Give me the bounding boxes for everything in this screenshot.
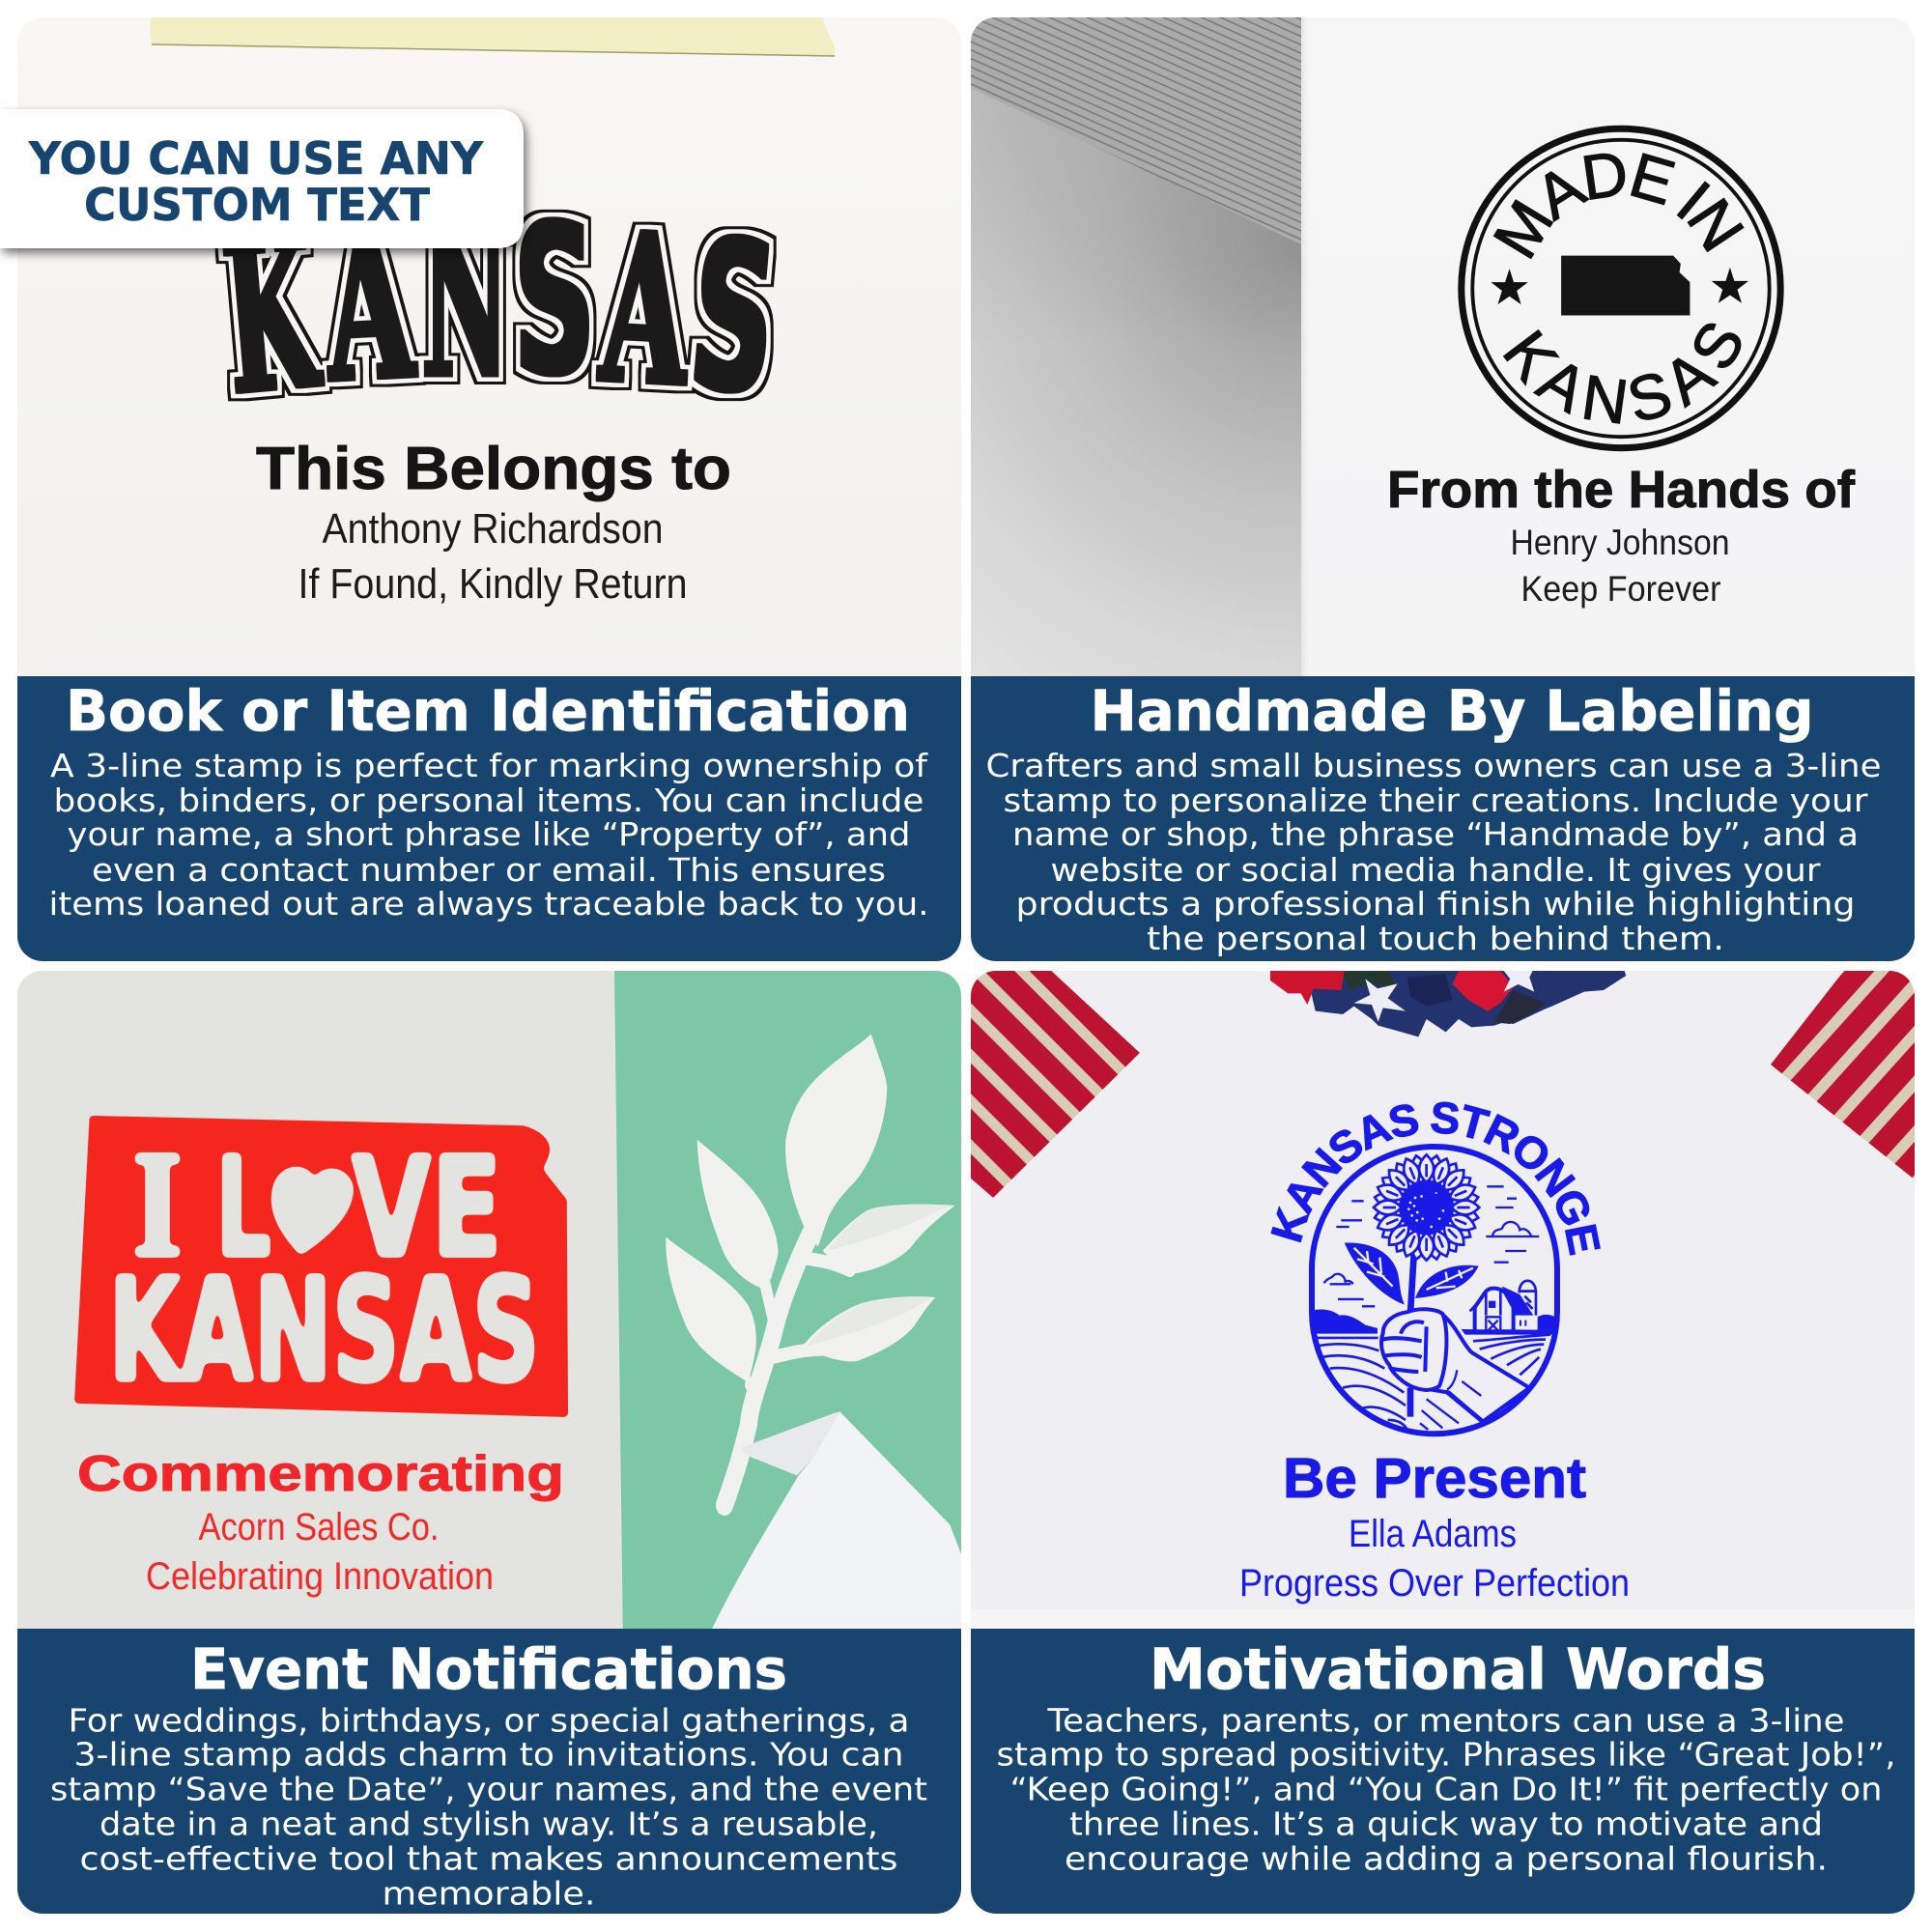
kansas silhouette: [79, 1120, 564, 1412]
caption body: encourage while adding a personal flourish.: [1065, 1839, 1828, 1878]
wreath navy flowers: [1288, 971, 1626, 1037]
leaf upper left: [697, 1140, 778, 1289]
caption body: Crafters and small business owners can use a 3-line: [985, 747, 1882, 784]
caption body: For weddings, birthdays, or special gatherings, a: [68, 1702, 910, 1739]
wreath navy highlight: [1407, 974, 1452, 1007]
panel: motivational words: [971, 971, 1915, 1914]
caption body: website or social media handle. It gives your: [1051, 851, 1821, 889]
leaf lower right: [802, 1296, 935, 1361]
branch stem: [724, 1235, 850, 1505]
caption heading: Book or Item Identification: [66, 678, 910, 744]
silo: [1520, 1281, 1536, 1316]
caption heading: Event Notifications: [190, 1636, 787, 1702]
photo background: white fabric: [971, 971, 1915, 1647]
striped ribbon right: [1771, 966, 1921, 1184]
forearm bottom edge: [1446, 1391, 1483, 1422]
leaf upper right: [823, 1205, 954, 1273]
clouds: [1324, 1222, 1539, 1284]
stamp: I love Kansas: [79, 1120, 564, 1415]
scene inside oval: [1309, 1186, 1562, 1430]
caption band: [971, 1629, 1915, 1914]
flower stem: [1410, 1249, 1414, 1417]
white card: [17, 971, 623, 1647]
caption body: date in a neat and stylish way. It’s a reusable,: [99, 1804, 878, 1843]
caption body: [997, 1702, 1895, 1878]
tree line right: [1462, 1315, 1562, 1335]
stamp: varsity KANSAS: S: [683, 195, 784, 440]
folded paper: [710, 1411, 963, 1634]
word: L: L: [215, 1127, 271, 1289]
paper branch: [666, 1034, 963, 1634]
panel: book or item identification: [17, 17, 961, 961]
sky dashes: [1336, 1186, 1526, 1306]
word: KANSAS: KANSAS: [108, 1248, 540, 1415]
caption body: name or shop, the phrase “Handmade by”, and a: [1012, 815, 1859, 853]
white card: [1301, 17, 1915, 694]
wreath dark shade: [1343, 971, 1398, 990]
stamp name line: Anthony Richardson: [323, 505, 663, 553]
love kansas lettering: [108, 1125, 540, 1415]
caption heading: Handmade By Labeling: [1090, 678, 1814, 744]
caption body: [48, 747, 929, 923]
star left: [1491, 269, 1528, 304]
stamp name line: Ella Adams: [1349, 1513, 1517, 1555]
masking tape: [150, 17, 835, 56]
stamp slogan line: Progress Over Perfection: [1239, 1562, 1630, 1605]
stamp company line: Acorn Sales Co.: [199, 1506, 439, 1548]
icon: heart: [273, 1169, 352, 1253]
caption heading: Motivational Words: [1150, 1636, 1766, 1702]
wall top shading: [971, 88, 1253, 248]
stamp return line: If Found, Kindly Return: [298, 560, 688, 608]
wreath: [1270, 971, 1626, 1037]
stamp: varsity KANSAS: S: [514, 182, 595, 421]
leaf left: [1345, 1242, 1405, 1305]
card edge shadow: [1301, 17, 1304, 676]
stamp celebrating line: Celebrating Innovation: [146, 1555, 494, 1598]
callout box: [0, 109, 524, 248]
stamp: varsity KANSAS: A: [320, 184, 419, 429]
caption body: your name, a short phrase like “Property of”, and: [68, 815, 911, 853]
photo background: green paper: [17, 971, 961, 1647]
star left: [1354, 979, 1406, 1022]
kansas silhouette: [1561, 256, 1690, 316]
caption band: [17, 1629, 961, 1914]
caption body: the personal touch behind them.: [1147, 920, 1724, 957]
caption body: stamp to spread positivity. Phrases like “Great Job!”,: [997, 1735, 1895, 1774]
wreath dark shade right: [1494, 990, 1546, 1024]
caption body: even a contact number or email. This ensures: [92, 851, 886, 889]
fist: [1381, 1309, 1446, 1390]
barn: [1470, 1289, 1525, 1331]
stamp: kansas strong sunflower: [1270, 1101, 1601, 1437]
caption band: [971, 676, 1915, 961]
stamp arc text: KANSAS STRONGE: [1270, 1101, 1601, 1256]
word: I: I: [131, 1125, 184, 1289]
caption body: stamp to personalize their creations. Include your: [1003, 781, 1868, 819]
leaf right: [1415, 1265, 1479, 1298]
stamp heading: This Belongs to: [256, 436, 731, 502]
caption body: memorable.: [383, 1874, 595, 1913]
seal text: kansas: KANSAS: [1503, 323, 1741, 424]
sunflower centre: [1400, 1180, 1454, 1235]
caption body: [985, 747, 1882, 957]
stamp: varsity KANSAS: K: [216, 192, 327, 441]
photo background: grey wall: [971, 17, 1304, 694]
caption body: books, binders, or personal items. You can include: [54, 781, 923, 819]
panel: event notifications: [17, 971, 963, 1914]
leaf upper right fold: [828, 1205, 952, 1251]
panel: handmade by labeling: [971, 17, 1915, 961]
arm hatching: [1420, 1370, 1481, 1430]
caption body: 3-line stamp adds charm to invitations. You can: [73, 1735, 904, 1774]
word: VE: VE: [352, 1127, 502, 1289]
stamp keep line: Keep Forever: [1520, 569, 1721, 609]
leaf lower right fold: [807, 1296, 932, 1347]
stamp heading: Be Present: [1283, 1447, 1586, 1510]
caption band: [17, 676, 961, 961]
seal rings: [1462, 128, 1780, 448]
arm: [1420, 1312, 1529, 1422]
stamp heading: Commemorating: [77, 1446, 564, 1502]
ridged corner: [971, 17, 1301, 244]
star right: [1712, 268, 1748, 303]
leaf top: [785, 1034, 887, 1247]
stamp: varsity KANSAS: A: [595, 187, 696, 433]
field furrows right: [1473, 1335, 1550, 1375]
caption body: items loaned out are always traceable back to you.: [48, 885, 929, 923]
tree line left: [1309, 1310, 1378, 1334]
caption body: Teachers, parents, or mentors can use a 3-line: [1046, 1702, 1845, 1739]
field furrows left: [1317, 1338, 1407, 1430]
paper flap: [741, 1411, 839, 1475]
callout: you can use any custom text: [0, 109, 524, 248]
stamp: varsity KANSAS: [214, 209, 777, 402]
star right: [1504, 971, 1534, 992]
caption body: [50, 1702, 927, 1913]
callout text: [28, 132, 484, 231]
stamp: made in kansas seal: [1458, 126, 1784, 452]
caption body: “Keep Going!”, and “You Can Do It!” fit perfectly on: [1010, 1770, 1882, 1808]
photo background: paper: [17, 17, 961, 694]
stamp heading: From the Hands of: [1387, 461, 1856, 519]
caption body: stamp “Save the Date”, your names, and the event: [50, 1770, 927, 1808]
striped ribbons: [966, 966, 1921, 1198]
barn side: [1502, 1287, 1533, 1316]
stamp: varsity KANSAS: N: [422, 183, 509, 424]
wreath red flower left: [1270, 971, 1345, 1005]
oval frame: [1312, 1147, 1557, 1434]
wreath red flower right: [1452, 971, 1514, 1011]
light strip at photo bottom: [971, 1609, 1915, 1638]
sunflower petals: [1374, 1154, 1480, 1261]
striped ribbon left: [966, 966, 1140, 1198]
caption body: three lines. It’s a quick way to motivate and: [1069, 1804, 1823, 1843]
stamp name line: Henry Johnson: [1511, 523, 1729, 562]
caption body: products a professional finish while highlighting: [1016, 885, 1855, 923]
callout text: YOU CAN USE ANY: [28, 132, 484, 185]
callout text: CUSTOM TEXT: [84, 179, 431, 231]
caption body: A 3-line stamp is perfect for marking ownership of: [50, 747, 929, 784]
leaf lower left: [666, 1237, 756, 1382]
caption body: cost-effective tool that makes announcements: [79, 1839, 898, 1878]
seal text: made in: MADE IN: [1493, 153, 1745, 259]
